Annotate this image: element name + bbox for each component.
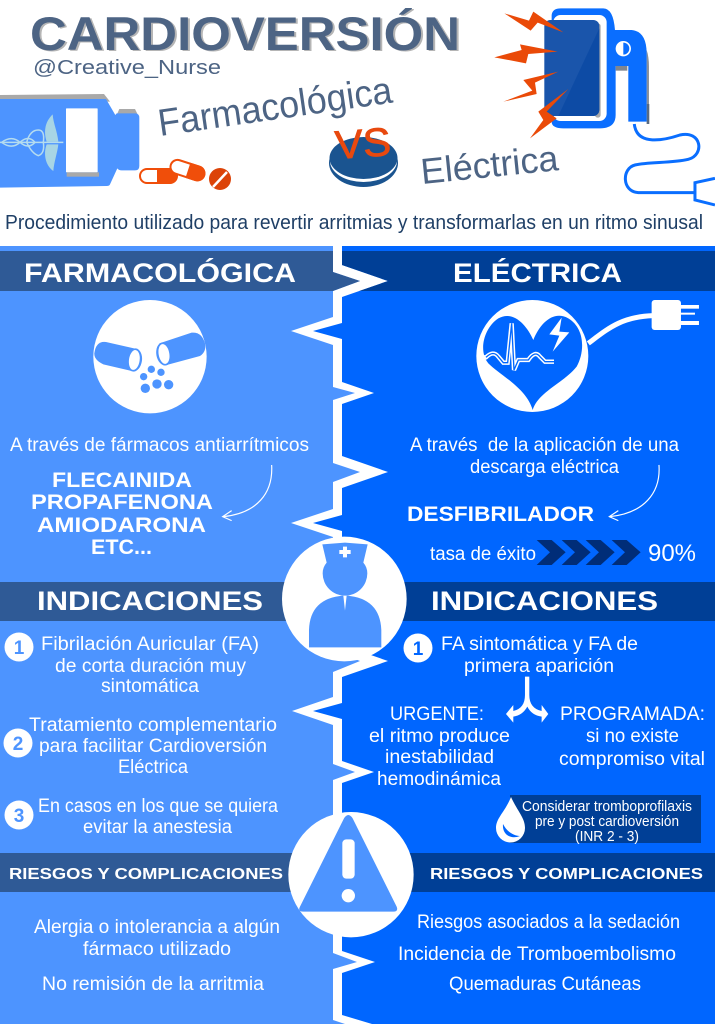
text: drug list: AMIODARONA [37,514,206,537]
subtitle: Procedimiento utilizado para revertir arritmias y transformarlas en un ritmo sinusal [5,212,703,234]
text: programada: compromiso vital [559,749,705,770]
indication 1 left: 1 [14,638,25,659]
risks left: fármaco utilizado [83,939,231,960]
text: drug list: PROPAFENONA [31,491,213,514]
header bands: farmacológica side [0,251,380,892]
callout: tromboprofilaxis [496,795,701,845]
icon: defibrillator paddle [544,8,649,128]
text: programada: si no existe [586,726,679,747]
heading: Eléctrica: Eléctrica [419,137,561,192]
title: CARDIOVERSIÓN [30,7,460,60]
text: 90%: 90% [648,540,696,567]
icon: plug [588,300,699,343]
callout: tromboprofilaxis: (INR 2 - 3) [575,829,639,845]
text: urgente: hemodinámica [377,769,501,790]
icon: pills [140,157,231,190]
panel: eléctrica background [313,246,715,1024]
text: desfibrilador: DESFIBRILADOR [407,503,594,526]
text: drug list: ETC... [91,536,152,559]
risks left [34,917,280,995]
text: programada: PROGRAMADA: [560,704,705,725]
callout: tromboprofilaxis: Considerar tromboprofilaxis [522,799,692,815]
header bands: eléctrica side [335,251,715,892]
callout: tromboprofilaxis: pre y post cardioversión [535,814,679,830]
icon: capsules [93,300,207,413]
icon: lightning bolts [494,12,568,138]
indication 1 right: 1 [413,639,424,660]
text: a través de la aplicación [410,435,679,478]
icon: heart with ECG [476,300,588,412]
indication 3 left: 3 [14,806,24,827]
heading: riesgos left: RIESGOS Y COMPLICACIONES [9,866,283,883]
text: tasa de éxito: tasa de éxito [430,544,536,565]
heading: ELÉCTRICA: ELÉCTRICA [453,257,622,288]
indication 1 right: primera aparición [464,656,614,677]
VS button: VS [334,120,392,168]
text: drug list: FLECAINIDA [52,469,192,492]
icon: power cable [625,124,715,205]
text: urgente [369,704,510,790]
indication 3 left [4,796,278,838]
chevrons [537,540,641,565]
risks right: Incidencia de Tromboembolismo [398,944,676,965]
indication 1 left: Fibrilación Auricular (FA) [41,634,259,655]
icon: nurse [282,537,407,661]
text: a través de la aplicación: A través de la aplicación de una [410,435,679,456]
arrow: fork [506,677,548,723]
tablet [209,168,231,190]
heading: riesgos right: RIESGOS Y COMPLICACIONES [430,866,703,883]
icon: drop [496,797,525,842]
indication 3 left: evitar la anestesia [83,817,232,838]
arrow: to drug list [223,465,272,521]
capsule [140,168,178,184]
heading: INDICACIONES right: INDICACIONES [431,586,658,616]
tilted capsule [168,157,208,183]
risks left: No remisión de la arritmia [42,974,264,995]
text: programada [559,704,705,770]
indication 2 left: Tratamiento complementario [29,715,277,736]
text: drug list [31,469,213,559]
text: urgente: el ritmo produce [369,726,510,747]
heading: FARMACOLÓGICA: FARMACOLÓGICA [24,257,296,288]
text: urgente: inestabilidad [385,747,494,768]
indication 2 left: 2 [13,734,23,755]
author handle: @Creative_Nurse [33,57,221,79]
indication 1 left [4,632,259,697]
arrow: to desfibrilador [609,465,659,521]
indication 1 left: de corta duración muy [55,656,246,677]
text: a través de fármacos: A través de fármacos antiarrítmicos [10,435,309,456]
indication 2 left: para facilitar Cardioversión [39,736,267,757]
indication 2 left: Eléctrica [118,757,188,778]
icon: warning [288,812,414,937]
risks right: Quemaduras Cutáneas [449,974,641,995]
indication 1 right: FA sintomática y FA de [441,634,638,655]
icon: medicine bottle [0,94,139,188]
panel: farmacológica background [0,246,360,1024]
heading: INDICACIONES left: INDICACIONES [37,586,263,616]
risks right [398,912,680,995]
heading: Farmacológica: Farmacológica [155,70,396,145]
indication 3 left: En casos en los que se quiera [38,796,278,817]
text: a través de la aplicación: descarga eléctrica [470,457,619,478]
risks left: Alergia o intolerancia a algún [34,917,280,938]
text: urgente: URGENTE: [390,704,484,725]
indication 1 left: sintomática [101,676,199,697]
risks right: Riesgos asociados a la sedación [417,912,680,933]
indication 2 left [4,715,277,778]
VS button [329,120,398,187]
indication 1 right [404,634,638,677]
